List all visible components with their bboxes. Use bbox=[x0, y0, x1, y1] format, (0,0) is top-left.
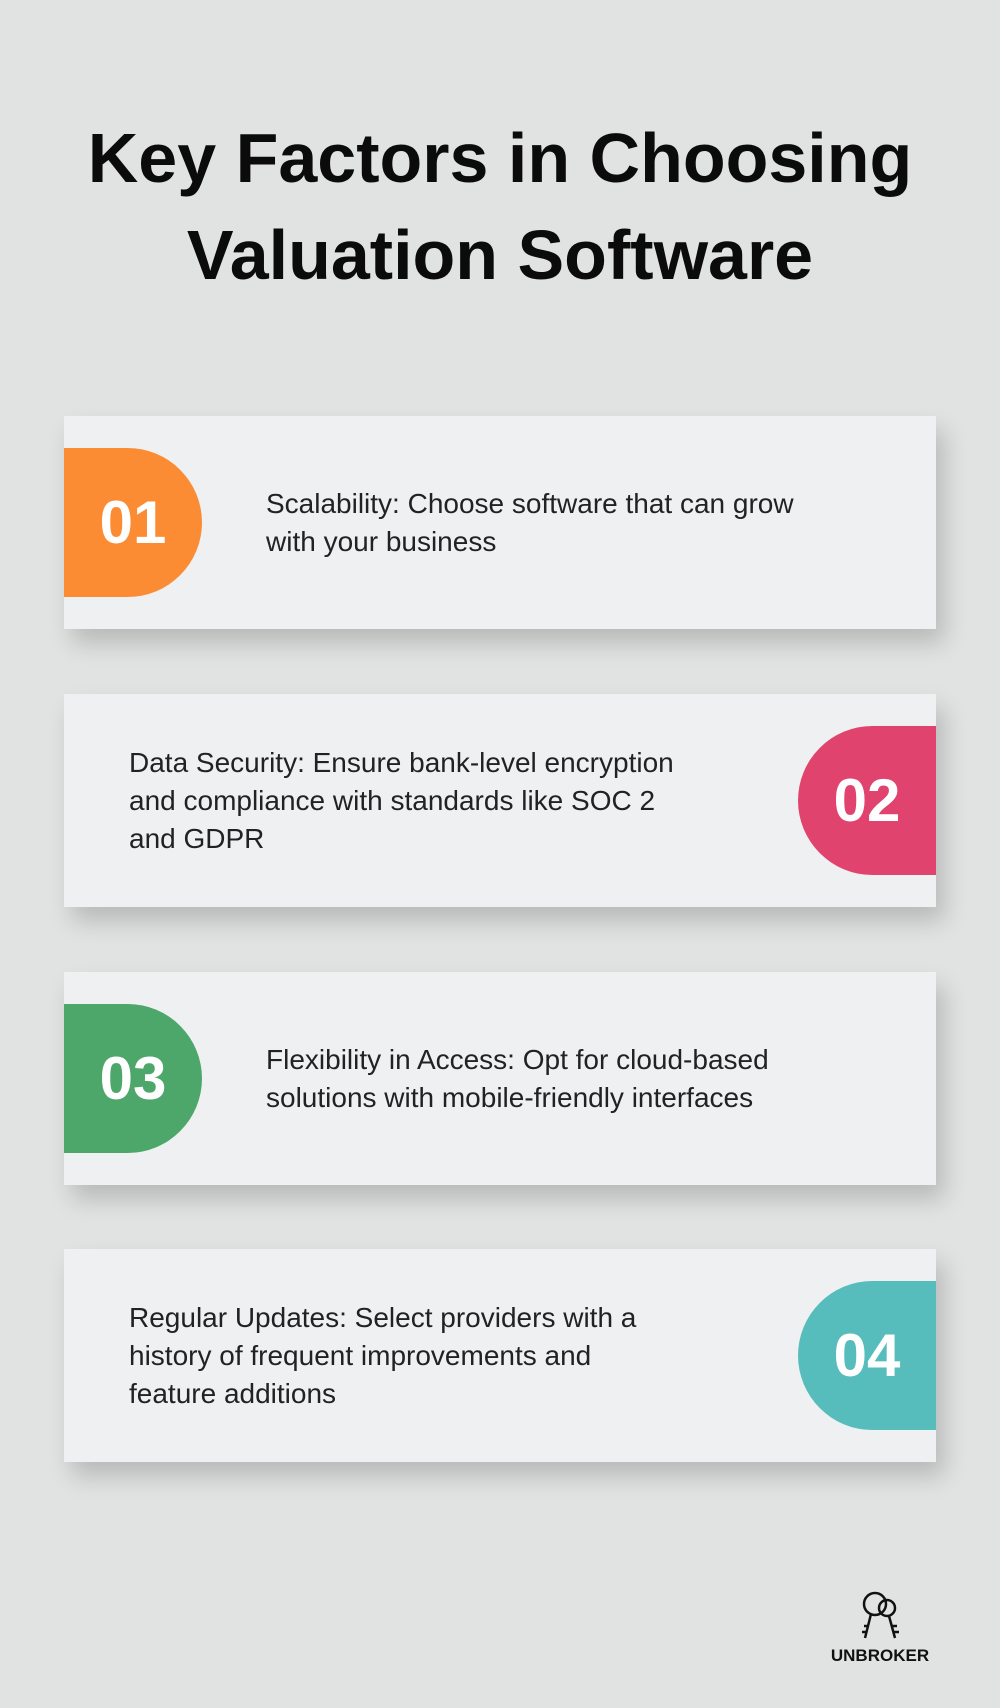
panel: card 01 bbox=[64, 416, 936, 629]
text 04: history of frequent improvements and bbox=[129, 1340, 591, 1370]
text 01: with your business bbox=[266, 526, 496, 556]
badge 04: 04 bbox=[834, 1322, 900, 1389]
text 03 bbox=[266, 1044, 769, 1113]
text 02: Data Security: Ensure bank-level encryption bbox=[129, 746, 674, 778]
title: Key Factors in Choosing bbox=[88, 119, 912, 197]
text 04: Regular Updates: Select providers with a bbox=[129, 1302, 636, 1332]
text 02 bbox=[129, 746, 674, 854]
text 01 bbox=[266, 488, 794, 557]
badge 02 bbox=[798, 726, 936, 875]
text 03: Flexibility in Access: Opt for cloud-based bbox=[266, 1044, 769, 1074]
text 02: and GDPR bbox=[129, 822, 264, 854]
panel: card 02 bbox=[64, 694, 936, 907]
badge 04 bbox=[798, 1281, 936, 1430]
icon: keys bbox=[862, 1592, 899, 1638]
text 01: Scalability: Choose software that can grow bbox=[266, 488, 794, 518]
text 04 bbox=[129, 1302, 636, 1408]
badge 03 bbox=[64, 1004, 202, 1153]
text 02: and compliance with standards like SOC 2 bbox=[129, 784, 655, 816]
panel: card 04 bbox=[64, 1249, 936, 1462]
text 04: feature additions bbox=[129, 1378, 336, 1408]
panel: card 03 bbox=[64, 972, 936, 1185]
title bbox=[88, 119, 912, 294]
logo: UNBROKER bbox=[831, 1646, 929, 1665]
title: Valuation Software bbox=[187, 216, 813, 294]
logo bbox=[831, 1592, 929, 1665]
badge 02: 02 bbox=[834, 767, 900, 834]
badge 03: 03 bbox=[100, 1045, 166, 1112]
badge 01 bbox=[64, 448, 202, 597]
text 03: solutions with mobile-friendly interfaces bbox=[266, 1082, 753, 1112]
badge 01: 01 bbox=[100, 489, 166, 556]
